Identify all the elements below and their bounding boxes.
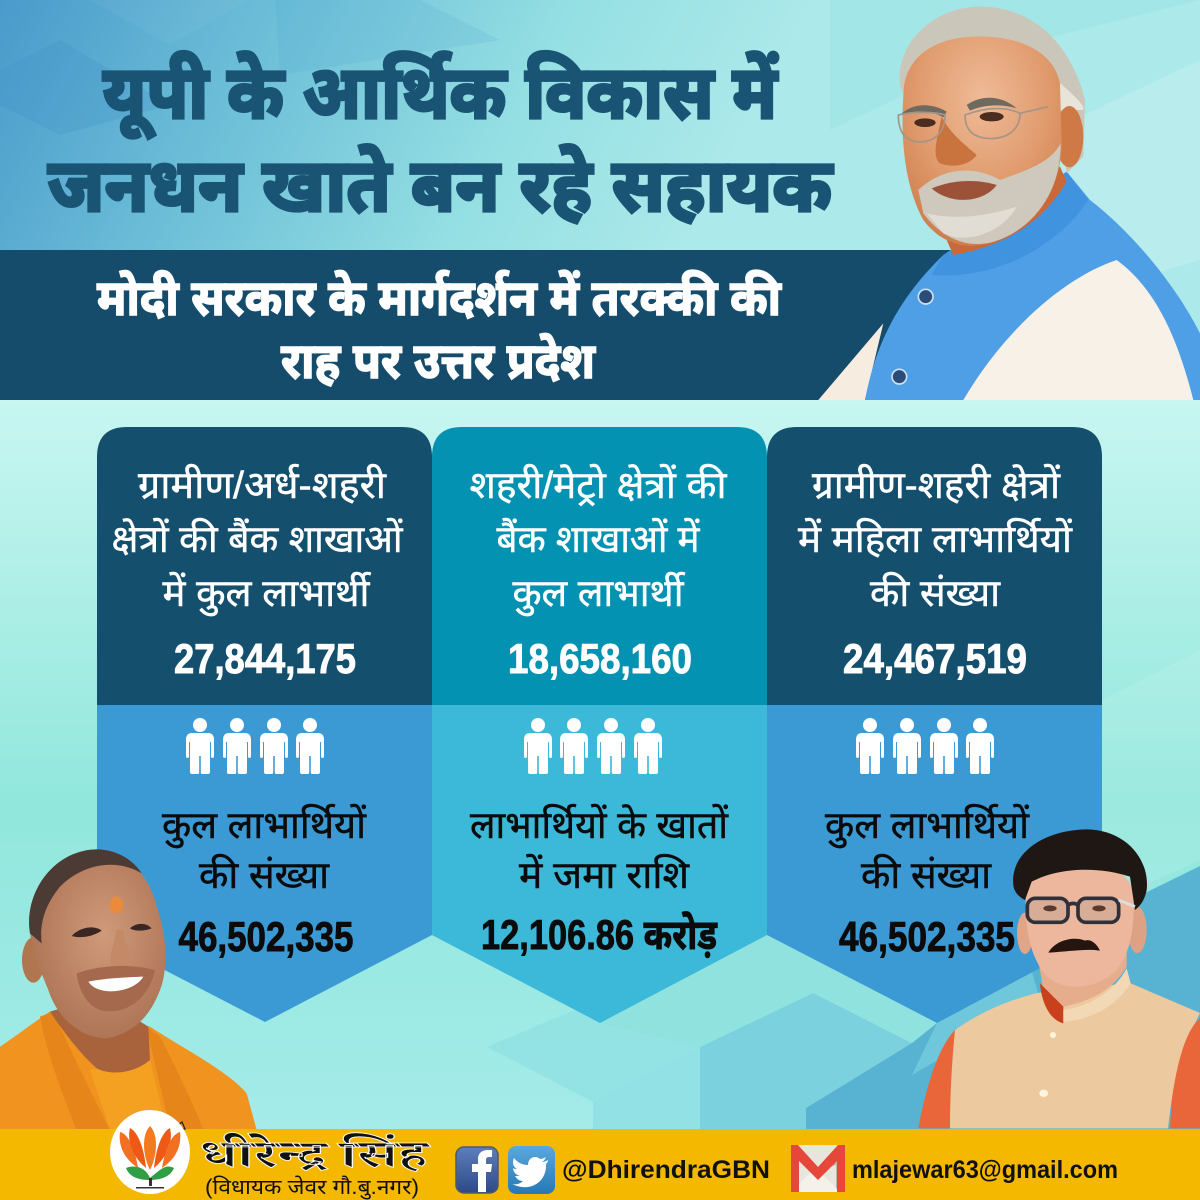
card header — [97, 427, 432, 705]
card heading: बैंक शाखाओं में — [496, 517, 701, 561]
label — [162, 803, 367, 897]
logo: BJP lotus — [110, 1110, 190, 1194]
portrait: Yogi — [0, 849, 257, 1130]
label: कुल लाभार्थियों — [162, 803, 367, 848]
number: 18,658,160 — [508, 635, 692, 682]
deposit amount: 12,106.86 करोड़ — [481, 911, 718, 958]
card heading: ग्रामीण-शहरी क्षेत्रों — [812, 463, 1061, 507]
email: mlajewar63@gmail.com — [852, 1156, 1118, 1184]
label: में जमा राशि — [519, 853, 690, 897]
total: 46,502,335 — [178, 913, 354, 960]
number: 27,844,175 — [174, 635, 356, 682]
icon: people — [186, 718, 324, 774]
title — [48, 51, 834, 227]
label: की संख्या — [199, 853, 330, 897]
label — [825, 803, 1030, 897]
subtitle band — [0, 250, 950, 400]
card heading: में महिला लाभार्थियों — [798, 517, 1073, 561]
icon: people — [856, 718, 994, 774]
card heading: कुल लाभार्थी — [512, 571, 686, 616]
twitter handle: @DhirendraGBN — [562, 1156, 770, 1184]
subtitle band: मोदी सरकार के मार्गदर्शन में तरक्की की — [97, 270, 782, 326]
number: 24,467,519 — [843, 635, 1027, 682]
panel: women beneficiaries — [767, 427, 1102, 1023]
card lower chevron — [767, 705, 1102, 1023]
panel: urban and metro beneficiaries — [432, 427, 767, 1023]
subtitle band: राह पर उत्तर प्रदेश — [281, 333, 596, 389]
card heading — [112, 463, 404, 616]
footer bar — [0, 1129, 1200, 1200]
card heading — [470, 463, 728, 616]
card lower chevron — [97, 705, 432, 1022]
name: (विधायक जेवर गौ.बु.नगर) — [205, 1175, 419, 1200]
card heading — [798, 463, 1073, 615]
portrait: Dhirendra Singh — [918, 829, 1200, 1128]
card lower chevron — [432, 705, 767, 1023]
icon: people — [524, 718, 662, 774]
name — [201, 1132, 432, 1200]
panel: rural and semi-urban beneficiaries — [97, 427, 432, 1022]
name: धीरेन्द्र सिंह — [201, 1132, 432, 1176]
title: यूपी के आर्थिक विकास में — [103, 51, 779, 139]
label: कुल लाभार्थियों — [825, 803, 1030, 848]
card header — [432, 427, 767, 705]
label: की संख्या — [861, 853, 992, 897]
label: लाभार्थियों के खातों — [470, 803, 729, 847]
card heading: की संख्या — [870, 571, 1001, 615]
card heading: क्षेत्रों की बैंक शाखाओं — [112, 517, 404, 561]
icon: twitter — [508, 1146, 555, 1194]
icon: facebook — [456, 1147, 498, 1193]
portrait: Modi — [818, 7, 1200, 400]
title: जनधन खाते बन रहे सहायक — [48, 144, 834, 227]
card heading: शहरी/मेट्रो क्षेत्रों की — [470, 463, 728, 507]
card header — [767, 427, 1102, 705]
card heading: ग्रामीण/अर्ध-शहरी — [138, 463, 387, 507]
total: 46,502,335 — [839, 913, 1015, 960]
card heading: में कुल लाभार्थी — [162, 571, 372, 616]
label — [470, 803, 729, 897]
icon: gmail — [791, 1145, 845, 1192]
